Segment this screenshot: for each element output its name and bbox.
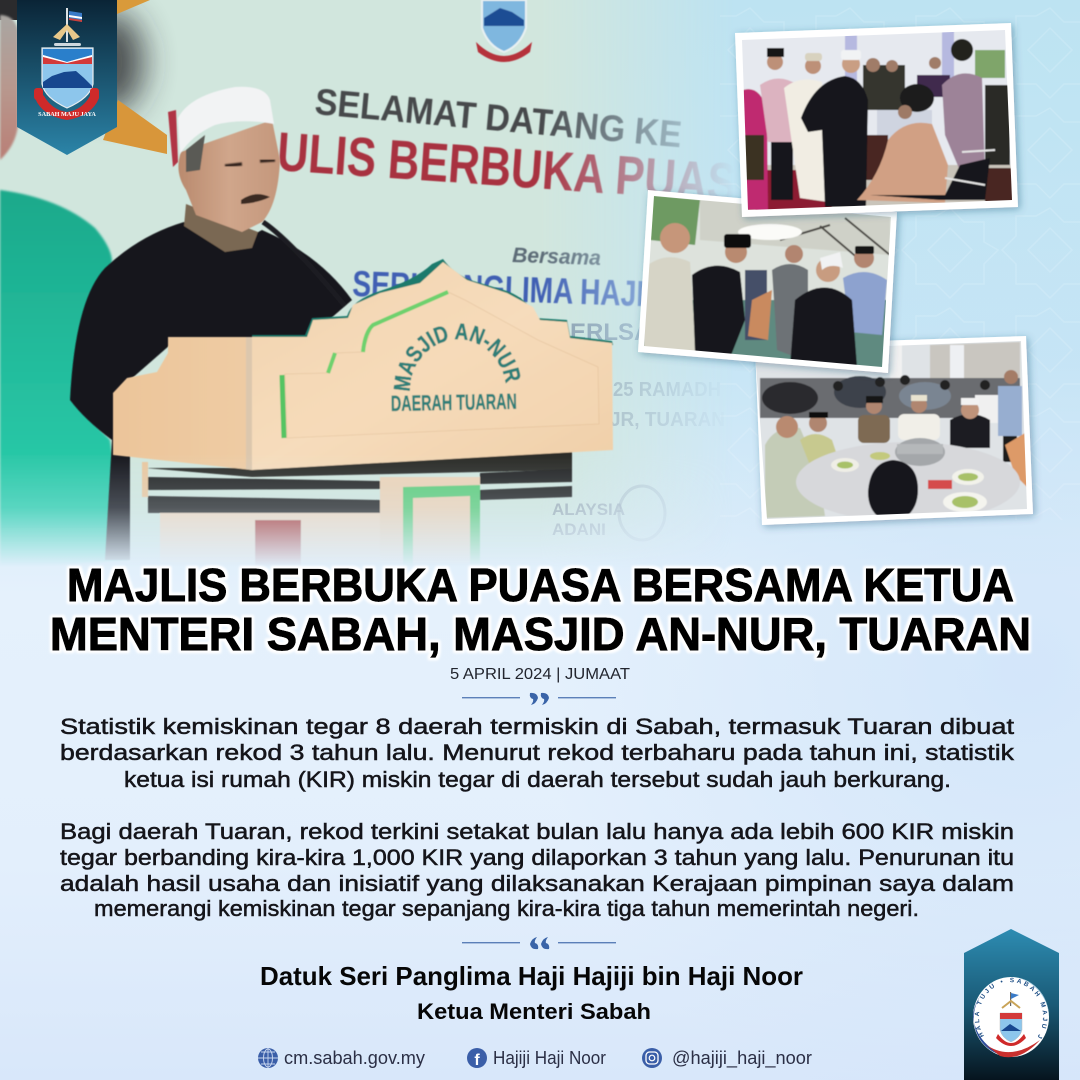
podium stand — [159, 512, 380, 545]
icon: flag — [53, 8, 82, 46]
title: MAJLIS BERBUKA PUASA BERSAMA KETUA — [67, 559, 1014, 611]
podium side panel — [113, 337, 252, 470]
mauve standing man — [942, 73, 985, 178]
podium lettering: MASJID AN-NUR — [393, 322, 521, 392]
icon: shield — [34, 48, 99, 120]
body paragraph 2: adalah hasil usaha dan inisiatif yang dilaksanakan Kerajaan pimpinan saya dalam — [60, 871, 1014, 896]
background guests — [863, 65, 905, 110]
seated guests — [765, 428, 825, 518]
divider: bottom quote — [462, 937, 616, 949]
body paragraph 2 — [60, 819, 1014, 921]
podium — [112, 258, 614, 564]
man in pink — [760, 78, 798, 142]
stage backdrop: 25 RAMADH — [613, 379, 721, 401]
title — [50, 559, 1031, 660]
podium front panel — [252, 259, 613, 345]
stage backdrop: JR, TUARAN — [610, 409, 725, 431]
body paragraph 1: Statistik kemiskinan tegar 8 daerah termiskin di Sabah, termasuk Tuaran dibuat — [60, 714, 1014, 739]
dark shadow at corner — [0, 0, 17, 20]
inset line — [285, 292, 599, 438]
collar — [184, 204, 258, 252]
signatory role: Ketua Menteri Sabah — [417, 999, 651, 1024]
hero photo: speaker at podium — [0, 0, 726, 564]
photo 1: greeting guest in wheelchair — [735, 23, 1020, 217]
body paragraph 1 — [60, 714, 1015, 792]
photo 3: banquet table — [750, 335, 1035, 530]
body paragraph 2: memerangi kemiskinan tegar sepanjang kira-kira tiga tahun memerintah negeri. — [94, 896, 919, 921]
seated man — [857, 123, 948, 203]
body paragraph 1: berdasarkan rekod 3 tahun lalu. Menurut rekod terbaharu pada tahun ini, statistik — [60, 740, 1015, 765]
body paragraph 1: ketua isi rumah (KIR) miskin tegar di daerah tersebut sudah jauh berkurang. — [124, 767, 951, 792]
photo 2: greeting guests — [638, 190, 897, 375]
stage backdrop: SERI PANGLIMA HAJI H — [352, 263, 673, 315]
orange swoosh — [117, 0, 150, 14]
stage backdrop: Bersama — [512, 244, 602, 270]
stage backdrop: ALAYSIA — [552, 500, 625, 519]
footer: facebook: Hajiji Haji Noor — [493, 1048, 606, 1068]
round table — [796, 442, 1020, 522]
wheelchair — [870, 158, 990, 200]
stage backdrop: ULIS BERBUKA PUAS — [275, 120, 738, 214]
body paragraph 2: tegar berbanding kira-kira 1,000 KIR yang dilaporkan 3 tahun yang lalu. Penurunan itu — [60, 845, 1014, 870]
people — [745, 270, 767, 340]
backdrop banner text: SELAMAT DATANG KE — [313, 81, 683, 155]
backdrop logo — [476, 0, 532, 62]
man in white robe — [784, 80, 828, 202]
footer: instagram: @hajiji_haji_noor — [672, 1048, 812, 1069]
podium: DAERAH TUARAN — [391, 389, 517, 416]
signatory name: Datuk Seri Panglima Haji Hajiji bin Haji Noor — [260, 961, 803, 991]
stage backdrop — [0, 0, 726, 545]
top-left banner with Sabah crest — [17, 0, 117, 155]
face — [178, 120, 280, 232]
body paragraph 2: Bagi daerah Tuaran, rekod terkini setakat bulan lalu hanya ada lebih 600 KIR miskin — [60, 819, 1014, 844]
divider: top quote — [462, 693, 616, 705]
stage backdrop: ERLSA — [570, 319, 651, 346]
icon: facebook: f — [474, 1052, 480, 1069]
icon: globe — [258, 1048, 278, 1068]
footer: website: cm.sabah.gov.my — [284, 1048, 425, 1068]
icon: shield: SABAH MAJU JAYA — [38, 111, 96, 118]
foreground cap — [868, 460, 918, 518]
badge: HALA TUJU • SABAH MAJU JAYA — [974, 978, 1048, 1039]
mic — [263, 222, 345, 306]
stage backdrop: ADANI — [552, 520, 606, 539]
woman in magenta — [743, 89, 768, 210]
left person: green shirt — [0, 14, 114, 563]
date: 5 APRIL 2024 | JUMAAT — [450, 666, 630, 683]
title: MENTERI SABAH, MASJID AN-NUR, TUARAN — [50, 608, 1031, 660]
robe — [70, 222, 352, 560]
main figure in black — [801, 76, 868, 207]
icon: instagram — [642, 1048, 662, 1068]
hat — [178, 87, 274, 154]
main speaker — [70, 87, 352, 560]
